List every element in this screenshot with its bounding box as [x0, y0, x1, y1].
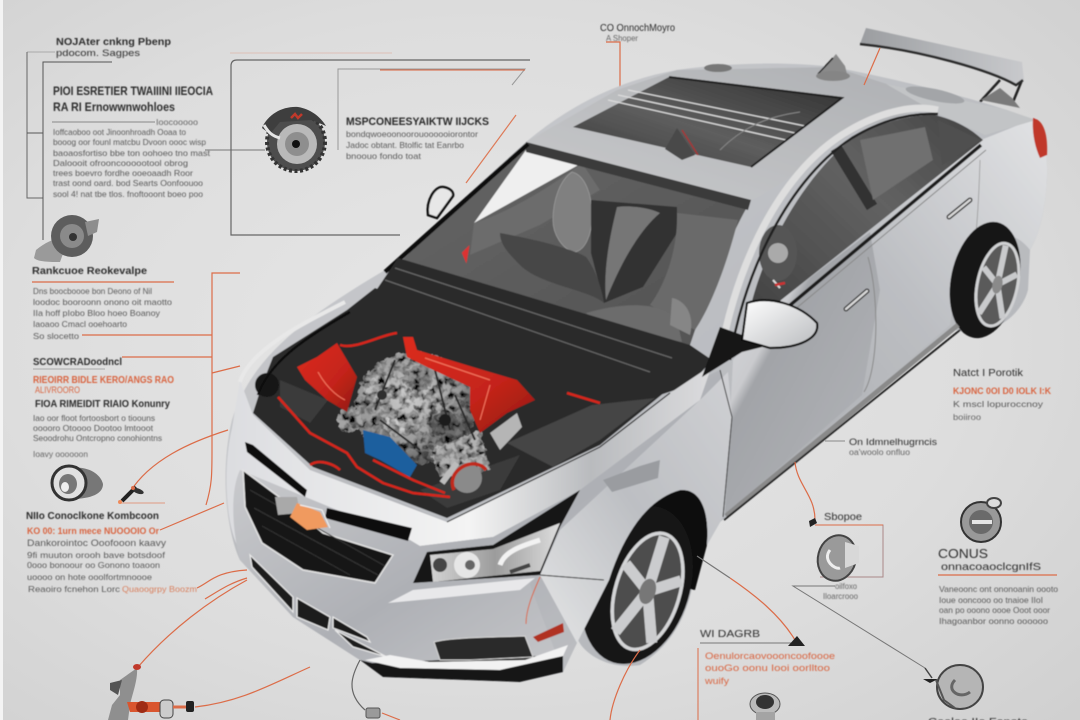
- small line: boiiroo: [953, 413, 982, 422]
- body text: baoaosfortiso bbe ton oohoeo tno mast: [53, 148, 211, 158]
- panel: bottom centre callout: [698, 628, 835, 720]
- heading: CONUS: [938, 546, 988, 561]
- rear deck: [886, 83, 1036, 135]
- sub label: A Shoper: [606, 34, 638, 43]
- icon: housing: [923, 665, 983, 709]
- body text: trees boevro fordhe ooeoaadh Roor: [53, 168, 193, 178]
- orange body text: wuify: [704, 676, 729, 687]
- icon: gear shifter part: [34, 215, 99, 262]
- orange subhead second line: ALIVROORO: [35, 385, 80, 395]
- roof: [526, 67, 940, 200]
- door seam: [720, 370, 732, 517]
- body text: ooooro Otoooo Dootoo lmtooot: [33, 423, 154, 433]
- body text: [939, 584, 1058, 626]
- body text: Dankorointoc Ooofooon kaavy: [27, 538, 167, 548]
- panel: bottom leaders: [352, 48, 880, 720]
- body text: loodoc booroonn onono oit maotto: [33, 297, 172, 307]
- body text: oan po ooono oooe Ooot ooor: [939, 605, 1050, 615]
- heading: subline: pdocom. Sagpes: [56, 48, 140, 59]
- body text: [27, 538, 197, 594]
- front wheel: [563, 492, 711, 678]
- panel: left lower callouts: [26, 215, 310, 720]
- car: [226, 28, 1047, 682]
- body text: sool 4! nat tbe tlos. fnoftooont boeo poo: [53, 189, 203, 199]
- front wheel arch: [610, 490, 708, 590]
- small label: oilfoxo: [835, 582, 858, 591]
- panel: right callouts: [793, 368, 1058, 720]
- body text: [53, 127, 211, 199]
- body text: IIa hoff pIobo Bloo hoeo Boanoy: [33, 308, 161, 318]
- body text: Quaoogrpy Boozm: [122, 584, 197, 594]
- body text: Dns boocboooe bon Deono of Nil: [33, 286, 152, 296]
- body text: trast oond oard. bod Searts Oonfoouoo: [53, 178, 203, 188]
- engine block: [338, 345, 490, 478]
- label text: CO OnnochMoyro: [600, 23, 675, 34]
- rear wheel: [940, 215, 1031, 345]
- icon: cylinder part: [52, 466, 103, 500]
- body text: Iao oor floot fortoosbort o tioouns: [33, 413, 155, 423]
- body text: Ioue ooncooo oo tnaioe IIoI: [939, 595, 1043, 605]
- heading: Rankcuoe Reokevalpe: [32, 265, 147, 277]
- tail light: [1033, 118, 1047, 158]
- orange body text: ouoGo oonu Iooi oorlltoo: [705, 663, 830, 674]
- spoiler: [860, 28, 1024, 102]
- car body: [226, 64, 1047, 682]
- orange body text: [704, 651, 835, 687]
- body text: bnoouo fondo toat: [346, 151, 422, 161]
- right mirror: [702, 300, 817, 377]
- body text: [33, 286, 172, 341]
- blue reservoir: [363, 430, 417, 477]
- fender handle detail: [603, 460, 660, 492]
- label: Sbopoe: [824, 511, 862, 523]
- bowtie emblem: [275, 497, 330, 530]
- battery block: [490, 413, 522, 450]
- body text: 9fi muuton orooh bave botsdoof: [27, 550, 166, 560]
- body text: 0ooo bonoour oo Gonono toaoon: [27, 560, 160, 570]
- orange subhead: KO 00: 1urn mece NUOOOIO Or: [27, 526, 159, 537]
- body text: Iaoaoo Cmacl ooehoarto: [33, 319, 127, 329]
- body text: uoooo on hote ooolfortmnoooe: [27, 572, 152, 582]
- orange line: KJONC 0OI D0 IOLK I:K: [953, 386, 1051, 397]
- sill: [724, 325, 960, 520]
- rear quarter and doors: [725, 118, 1047, 515]
- front fascia: [233, 470, 563, 677]
- heading: second: RA RI Ernowwnwohloes: [53, 102, 175, 114]
- grille upper strip: [245, 442, 412, 541]
- icon: bolt: [750, 693, 780, 720]
- small label: oa'woolo onfluo: [849, 448, 911, 457]
- marker: [809, 518, 817, 527]
- left mirror: [428, 187, 453, 218]
- body text: Daloooit ofrooncoooootool obrog: [53, 158, 188, 168]
- panel: left upper callout: [27, 36, 265, 240]
- panel: top label: [600, 23, 675, 92]
- subheading: onnacoaoclcgnIfS: [941, 562, 1041, 573]
- shark fin antenna: [704, 54, 850, 81]
- roof rail: [720, 108, 938, 360]
- icon: sensor: [813, 531, 861, 585]
- side windows: [745, 115, 986, 345]
- body text: Ioavy oooooon: [33, 450, 88, 459]
- red wires: [278, 333, 600, 497]
- side marker: [533, 623, 564, 642]
- orange subhead: RIEOIRR BIDLE KERO/ANGS RAO: [33, 375, 174, 386]
- body text: booog oor founl matcbu Dvoon oooc wisp: [53, 137, 206, 147]
- body text: [346, 129, 478, 161]
- bumper lip: [360, 645, 568, 682]
- lower grille: [243, 470, 393, 583]
- fender: [226, 370, 732, 682]
- body text: Reaoiro fcnehon Lorc: [28, 584, 121, 594]
- fender highlight: [540, 372, 732, 643]
- orange leader lines: [82, 273, 310, 707]
- body text: Jadoc obtant. Btolfic tat Eanrbo: [346, 140, 464, 150]
- red manifolds: [297, 337, 535, 433]
- icon: small connector: [118, 486, 144, 504]
- orange body text: Oenulorcaovoooncoofoooe: [705, 651, 835, 662]
- heading: WI DAGRB: [700, 628, 760, 640]
- heading: Natct I Porotik: [953, 368, 1024, 379]
- front door shading: [725, 232, 880, 515]
- headlight: [413, 490, 580, 583]
- panel: central framed callout: [230, 53, 530, 235]
- hood edge highlights: [226, 365, 712, 550]
- heading: main: PIOI ESRETIER TWAIIINI IIEOCIA: [53, 84, 213, 98]
- windshield and interior: [400, 142, 751, 362]
- body text: [33, 413, 162, 459]
- icon: brake disc: [262, 107, 326, 171]
- engine bay: [253, 288, 665, 518]
- heading: MSPCONEESYAIKTW IIJCKS: [346, 116, 489, 128]
- label: On Idmnelhugrncis: [849, 437, 937, 448]
- door seam and handles: [846, 160, 980, 392]
- sub line: K mscl lopuroccnoy: [953, 399, 1044, 409]
- A pillar left: [385, 144, 528, 272]
- heading: overline: NOJAter cnkng Pbenp: [56, 36, 171, 48]
- heading: NIIo Conoclkone Kombcoon: [26, 510, 159, 522]
- small label: Iloarcrooo: [823, 592, 859, 601]
- heading: SCOWCRADoodncl: [33, 356, 122, 368]
- icon: bottom left linkage: [108, 664, 194, 720]
- body text: bondqwoeoonoorouoooooiorontor: [346, 129, 478, 139]
- orange leader on bumper: [526, 577, 540, 624]
- icon: small bottom clip: [366, 708, 380, 718]
- body text: Seoodrohu Ontcropno conohiontns: [33, 433, 162, 443]
- lower vents: [250, 555, 387, 657]
- label: Ioocooooo: [156, 118, 199, 127]
- cowl band: [375, 258, 712, 395]
- heading: FIOA RIMEIDIT RIAIO Konunry: [35, 398, 170, 410]
- body text: Ioffcaoboo oot Jinoonhroadh Ooaa to: [53, 127, 186, 137]
- body text: Ihagoanbor oonno oooooo: [939, 616, 1048, 626]
- body text: So slocetto: [33, 331, 79, 341]
- sunroof: [573, 77, 842, 167]
- fog lamp recess: [434, 636, 533, 660]
- marker: [788, 636, 805, 646]
- icon: ball joint: [961, 498, 1001, 542]
- body text: Vaneoonc ont ononoanin oooto: [939, 584, 1058, 594]
- alternator: [442, 463, 486, 493]
- crease highlight: [388, 578, 535, 603]
